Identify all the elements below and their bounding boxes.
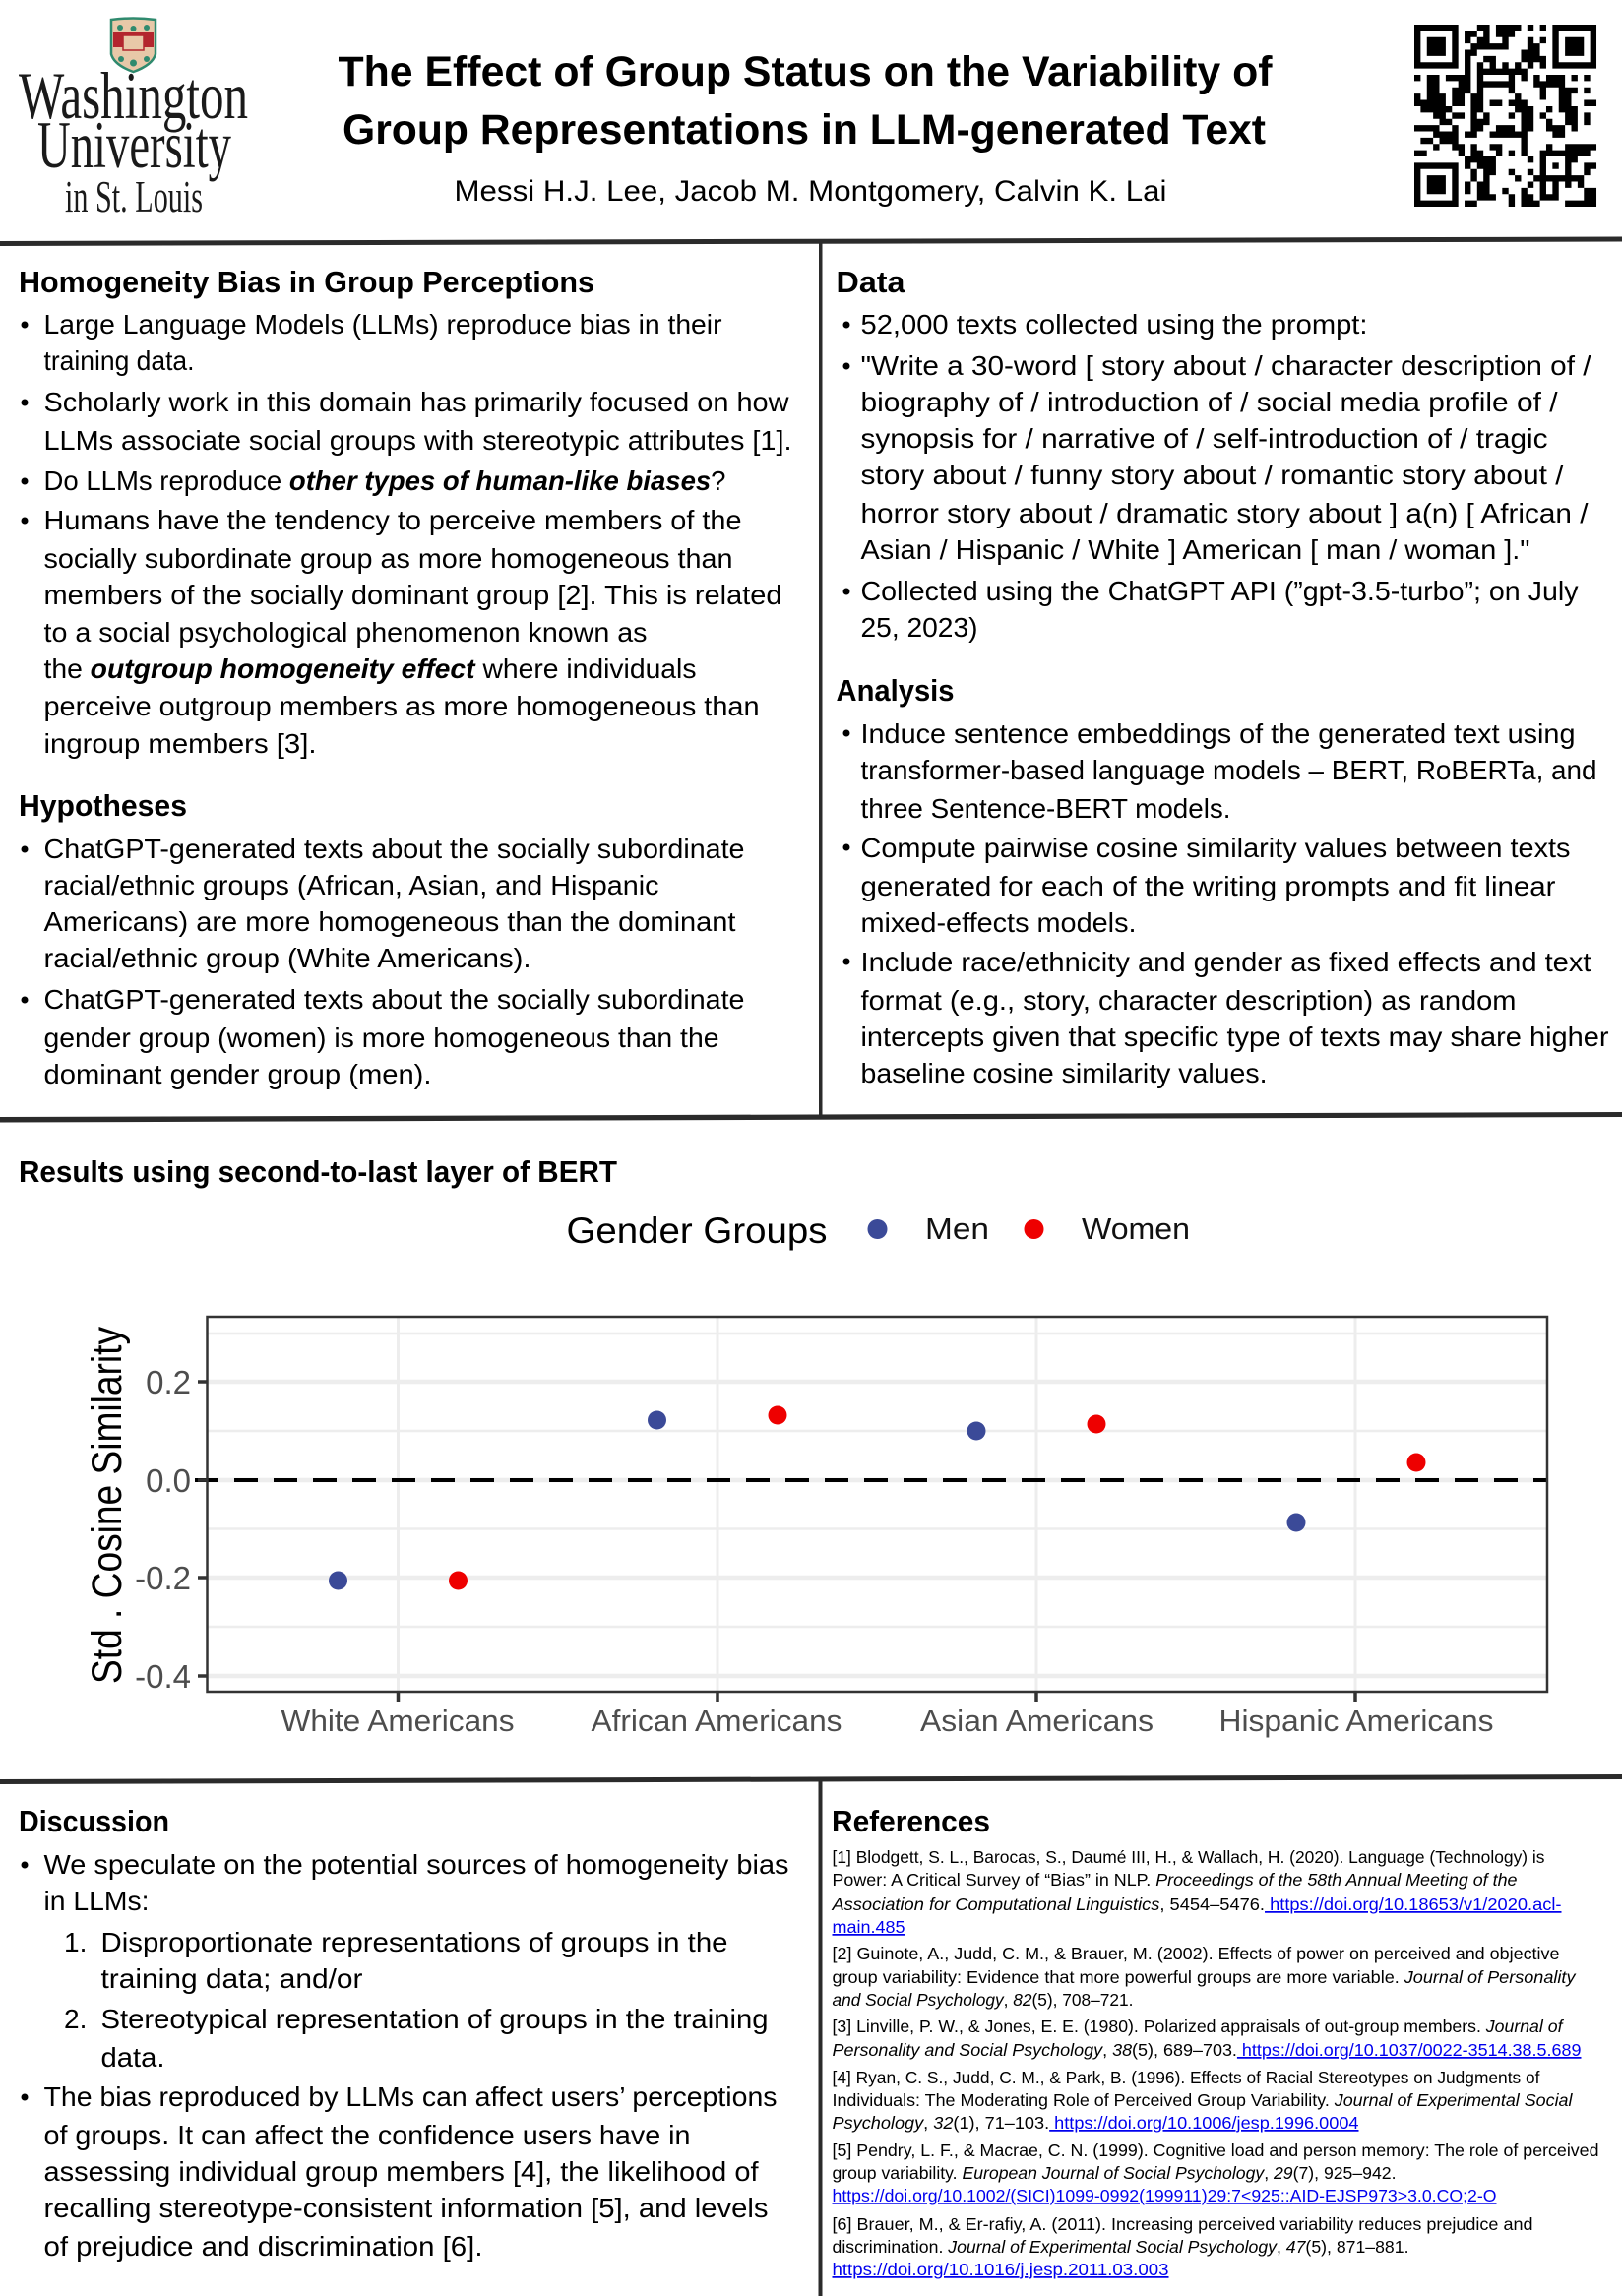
panel: discussion — [19, 1804, 789, 2262]
heading: Results using second-to-last layer of BERT — [19, 1154, 617, 1189]
bullet list: training data. — [43, 345, 195, 376]
x axis labels: White Americans — [281, 1704, 514, 1738]
bullet list: "Write a 30-word [ story about / character description of / — [860, 350, 1591, 381]
bullet list: to a social psychological phenomenon known as — [43, 617, 648, 648]
reference list: https://doi.org/10.1002/(SICI)1099-0992(199911)29:7<925::AID-EJSP973>3.0.CO;2-O — [833, 2186, 1496, 2205]
bullet list: data. — [100, 2042, 165, 2073]
bullet list: gender group (women) is more homogeneous than the — [43, 1023, 718, 1053]
reference list: Association for Computational Linguistics , 5454–5476. https://doi.org/10.18653/v1/2020.acl- — [831, 1894, 1562, 1914]
bullet list: Humans have the tendency to perceive members of the — [43, 505, 742, 535]
panel: references — [831, 1804, 1598, 2279]
bullet list: Compute pairwise cosine similarity values between texts — [860, 833, 1571, 863]
panel: analysis — [837, 673, 1608, 1088]
x axis labels: African Americans — [591, 1704, 842, 1738]
title: Group Representations in LLM-generated Text — [343, 106, 1266, 154]
bullet list: socially subordinate group as more homogeneous than — [43, 543, 732, 574]
bullet list: Collected using the ChatGPT API (”gpt-3.5-turbo”; on July — [860, 576, 1579, 606]
heading: References — [832, 1804, 990, 1838]
bullet list: racial/ethnic groups (African, Asian, and Hispanic — [43, 870, 659, 900]
y axis tick labels: 0.0 — [146, 1462, 191, 1499]
panel: results — [19, 1154, 1547, 1738]
bullet list: 1. — [64, 1927, 87, 1957]
reference list: discrimination. Journal of Experimental Social Psychology, 47(5), 871–881. — [833, 2237, 1409, 2257]
heading: Homogeneity Bias in Group Perceptions — [19, 265, 594, 299]
reference list: group variability. European Journal of Social Psychology, 29(7), 925–942. — [833, 2163, 1396, 2183]
bullet list — [22, 309, 791, 759]
y axis tick labels: 0.2 — [146, 1364, 191, 1400]
reference list: [3] Linville, P. W., & Jones, E. E. (1980). Polarized appraisals of out-group members. Journal of — [833, 2017, 1565, 2036]
reference list: https://doi.org/10.1016/j.jesp.2011.03.003 — [833, 2260, 1169, 2279]
dot plot — [84, 1317, 1547, 1738]
bullet list: 52,000 texts collected using the prompt: — [860, 309, 1368, 340]
bullet list: Americans) are more homogeneous than the dominant — [43, 906, 736, 937]
bullet list: synopsis for / narrative of / self-introduction of / tragic — [860, 423, 1547, 454]
bullet list: 2. — [64, 2004, 87, 2034]
bullet list: Do LLMs reproduce other types of human-like biases? — [43, 465, 726, 496]
heading: Hypotheses — [19, 788, 187, 823]
bullet list: the outgroup homogeneity effect where individuals — [43, 653, 697, 684]
data points: men — [329, 1411, 1305, 1590]
bullet list: We speculate on the potential sources of homogeneity bias — [43, 1849, 789, 1880]
logo: Washington University in St. Louis — [19, 18, 248, 221]
bullet list — [842, 718, 1608, 1088]
icon: QR code — [1414, 25, 1596, 207]
reference list: [4] Ryan, C. S., Judd, C. M., & Park, B. (1996). Effects of Racial Stereotypes on Judgments of — [833, 2068, 1540, 2087]
bullet list: perceive outgroup members as more homogeneous than — [43, 691, 760, 721]
bullet list: Induce sentence embeddings of the generated text using — [860, 718, 1575, 749]
reference list — [831, 1847, 1598, 2279]
bullet list: Disproportionate representations of groups in the — [100, 1927, 728, 1957]
bullet list: Scholarly work in this domain has primarily focused on how — [43, 387, 789, 417]
bullet list: assessing individual group members [4], the likelihood of — [43, 2156, 759, 2187]
y axis tick labels — [135, 1364, 191, 1695]
bullet list — [22, 1849, 789, 2262]
logo: Washington University in St. Louis: University — [37, 107, 231, 182]
title: The Effect of Group Status on the Variability of — [339, 48, 1273, 95]
bullet list: generated for each of the writing prompts and fit linear — [860, 871, 1555, 901]
bullet list: intercepts given that specific type of texts may share higher — [860, 1022, 1608, 1052]
bullet list: transformer-based language models – BERT, RoBERTa, and — [860, 755, 1596, 785]
reference list: Personality and Social Psychology , 38(5), 689–703. https://doi.org/10.1037/0022-3514.38.5.689 — [833, 2040, 1581, 2060]
x axis labels: Hispanic Americans — [1218, 1704, 1494, 1738]
logo: Washington University in St. Louis: Washington — [19, 58, 248, 133]
bullet list: of prejudice and discrimination [6]. — [43, 2231, 482, 2262]
bullet list: horror story about / dramatic story about ] a(n) [ African / — [860, 498, 1589, 528]
legend: Gender Groups — [567, 1210, 827, 1251]
authors: Messi H.J. Lee, Jacob M. Montgomery, Calvin K. Lai — [455, 175, 1167, 208]
bullet list: training data; and/or — [100, 1963, 362, 1994]
bullet list: Large Language Models (LLMs) reproduce bias in their — [43, 309, 722, 340]
y axis tick labels: -0.2 — [135, 1560, 191, 1596]
reference list: [5] Pendry, L. F., & Macrae, C. N. (1999). Cognitive load and person memory: The role of perceived — [833, 2141, 1598, 2160]
y axis tick labels: -0.4 — [135, 1658, 191, 1695]
bullet list — [22, 834, 744, 1089]
bullet list: racial/ethnic group (White Americans). — [43, 943, 531, 973]
heading: Analysis — [837, 673, 955, 708]
heading: Data — [837, 265, 905, 299]
reference list: group variability: Evidence that more powerful groups are more variable. Journal of Personality — [833, 1967, 1577, 1987]
bullet list: ChatGPT-generated texts about the socially subordinate — [43, 834, 744, 864]
bullet list: 25, 2023) — [860, 612, 978, 643]
icon: university shield — [111, 18, 156, 72]
legend: Women — [1082, 1211, 1190, 1246]
bullet list — [842, 309, 1591, 643]
bullet list: format (e.g., story, character description) as random — [860, 985, 1516, 1016]
legend — [567, 1210, 1190, 1251]
reference list: main.485 — [833, 1917, 905, 1937]
bullet list: Include race/ethnicity and gender as fixed effects and text — [860, 947, 1591, 977]
bullet list: mixed-effects models. — [860, 907, 1136, 938]
x axis labels: Asian Americans — [920, 1704, 1154, 1738]
heading: Discussion — [19, 1804, 169, 1838]
data points: women — [449, 1405, 1425, 1590]
bullet list: recalling stereotype-consistent information [5], and levels — [43, 2193, 769, 2223]
bullet list: The bias reproduced by LLMs can affect users’ perceptions — [43, 2081, 778, 2112]
bullet list: Asian / Hispanic / White ] American [ man / woman ]." — [860, 534, 1529, 565]
reference list: Psychology, 32(1), 71–103. https://doi.org/10.1006/jesp.1996.0004 — [833, 2113, 1359, 2133]
panel: hypotheses — [19, 788, 744, 1089]
title — [339, 48, 1273, 154]
legend: Men — [925, 1211, 989, 1246]
panel: homogeneity bias in group perceptions — [19, 265, 791, 759]
reference list: Power: A Critical Survey of “Bias” in NLP. Proceedings of the 58th Annual Meeting of the — [833, 1870, 1518, 1890]
header — [19, 18, 1596, 221]
bullet list: members of the socially dominant group [2]. This is related — [43, 580, 781, 610]
y axis title: Std . Cosine Similarity — [84, 1327, 131, 1684]
logo: Washington University in St. Louis: in St. Louis — [65, 171, 203, 221]
bullet list: story about / funny story about / romantic story about / — [860, 460, 1564, 490]
bullet list: baseline cosine similarity values. — [860, 1058, 1268, 1088]
bullet list: ingroup members [3]. — [43, 728, 317, 759]
reference list: [6] Brauer, M., & Er-rafiy, A. (2011). Increasing perceived variability reduces prejudice and — [833, 2214, 1533, 2234]
panel: data — [837, 265, 1591, 643]
bullet list: dominant gender group (men). — [43, 1059, 431, 1089]
bullet list: LLMs associate social groups with stereotypic attributes [1]. — [43, 425, 791, 456]
reference list: [2] Guinote, A., Judd, C. M., & Brauer, M. (2002). Effects of power on perceived and objective — [833, 1944, 1559, 1963]
bullet list: ChatGPT-generated texts about the socially subordinate — [43, 984, 744, 1015]
bullet list: in LLMs: — [43, 1886, 150, 1916]
reference list: [1] Blodgett, S. L., Barocas, S., Daumé III, H., & Wallach, H. (2020). Language (Technology) is — [833, 1847, 1545, 1867]
bullet list: biography of / introduction of / social media profile of / — [860, 387, 1558, 417]
x axis labels — [281, 1704, 1494, 1738]
bullet list: three Sentence-BERT models. — [860, 793, 1230, 824]
bullet list: Stereotypical representation of groups in the training — [100, 2004, 768, 2034]
reference list: and Social Psychology, 82(5), 708–721. — [833, 1990, 1134, 2010]
bullet list: of groups. It can affect the confidence users have in — [43, 2120, 691, 2150]
reference list: Individuals: The Moderating Role of Perceived Group Variability. Journal of Experimental Social — [833, 2090, 1574, 2110]
